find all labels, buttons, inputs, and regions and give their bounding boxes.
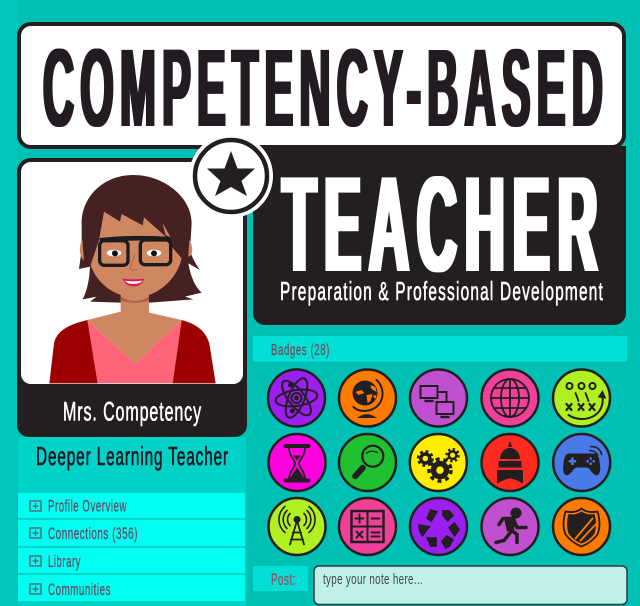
face bbox=[91, 212, 182, 297]
badge: networked computers bbox=[410, 370, 467, 426]
mouth bbox=[122, 279, 144, 286]
badge: capitol bbox=[482, 434, 538, 491]
eyes bbox=[107, 250, 121, 256]
note input: type your note here... bbox=[323, 571, 423, 588]
portrait bbox=[49, 175, 216, 383]
menu item: library bbox=[18, 548, 245, 573]
post label: Post: bbox=[271, 570, 296, 589]
badge: shield bbox=[553, 498, 610, 555]
badge: running figure bbox=[482, 498, 538, 555]
badge: calculator bbox=[339, 498, 396, 555]
menu item: profile overview bbox=[18, 493, 245, 518]
badge: desk globe bbox=[339, 370, 396, 426]
badge: radio tower bbox=[268, 498, 326, 555]
badge: game controller bbox=[553, 434, 610, 491]
jacket bbox=[49, 320, 216, 383]
badge: wire globe bbox=[482, 370, 538, 426]
panel: profile card bbox=[17, 160, 247, 437]
star medallion bbox=[189, 134, 273, 218]
role title: Deeper Learning Teacher bbox=[36, 441, 229, 471]
shirt bbox=[87, 320, 182, 383]
glasses bbox=[100, 238, 171, 265]
menu item: library: Library bbox=[48, 552, 81, 571]
badges header: Badges (28) bbox=[271, 342, 330, 359]
badge: gears bbox=[410, 434, 467, 491]
badge: magnifier bbox=[339, 434, 396, 491]
nose bbox=[130, 255, 137, 270]
menu item: communities bbox=[18, 575, 245, 601]
badge: playbook bbox=[553, 370, 610, 426]
menu item: profile overview: Profile Overview bbox=[48, 496, 127, 516]
badge: hourglass bbox=[268, 434, 326, 491]
ears bbox=[80, 240, 192, 261]
note input bbox=[314, 566, 627, 604]
menu item: communities: Communities bbox=[48, 580, 111, 599]
name plate bbox=[17, 370, 247, 437]
badge: recycle bbox=[410, 498, 467, 555]
menu item: connections bbox=[18, 520, 245, 546]
menu bbox=[18, 493, 245, 601]
title banner bbox=[19, 24, 624, 150]
badges header bbox=[253, 336, 627, 362]
badge: atom bbox=[268, 370, 325, 426]
badge grid bbox=[268, 370, 610, 555]
panel: teacher heading bbox=[253, 146, 626, 325]
post label bbox=[253, 566, 308, 591]
menu item: connections: Connections (356) bbox=[48, 524, 138, 543]
neck and chest bbox=[87, 292, 182, 364]
hair back bbox=[79, 175, 202, 303]
name: Mrs. Competency bbox=[63, 396, 202, 426]
